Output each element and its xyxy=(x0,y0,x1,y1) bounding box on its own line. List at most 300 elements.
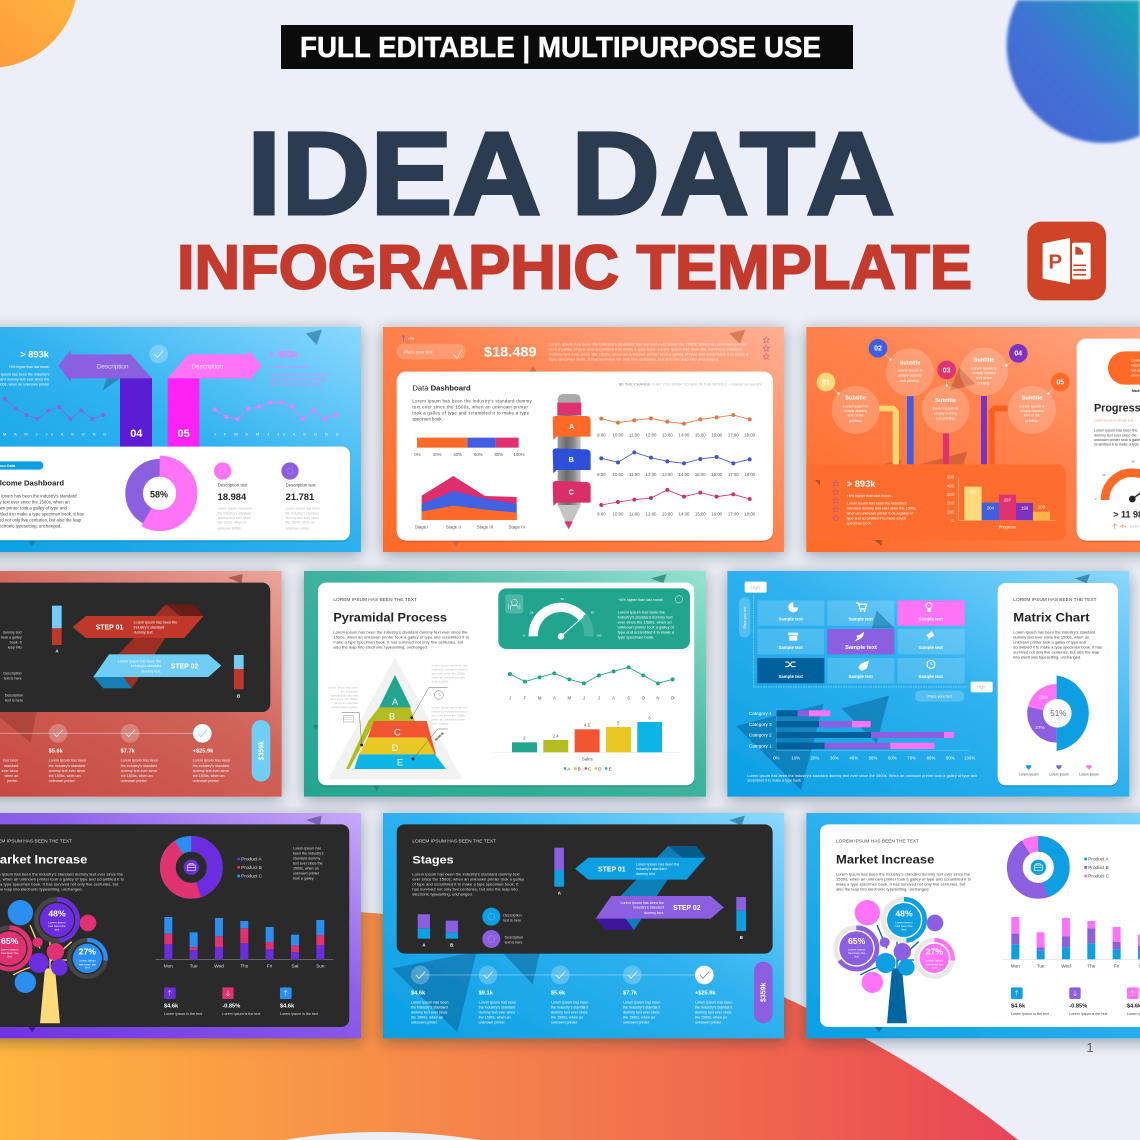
stacked bar chart: week: Wed xyxy=(214,963,224,968)
text: timeline values: unknown printer. xyxy=(623,1020,650,1024)
ring: 48%: 48% xyxy=(48,909,66,919)
stat: 4.6k purple: $4.6k xyxy=(164,1004,179,1010)
horizontal bar chart: 10% xyxy=(791,755,800,760)
stat: 4.6k pink xyxy=(1127,987,1140,1016)
text: timeline values: unknown printer. xyxy=(551,1020,578,1024)
card: dashboard white xyxy=(0,447,350,540)
text: timeline values: unknown printer. xyxy=(121,779,147,783)
card: dark xyxy=(0,824,349,1027)
gauge: 25 xyxy=(530,611,534,615)
line chart: C: 14:00 xyxy=(679,512,690,517)
text: header body: Lorem Ipsum has been the industry's standard dummy text ever since the 1500s. When an unknown printer xyxy=(549,343,747,347)
ring: 27%: 27% xyxy=(79,947,96,957)
axis: matrix xyxy=(753,595,967,687)
pill: place your text: +5% xyxy=(408,337,414,341)
line chart: B: 10:00 xyxy=(613,472,624,477)
bubble: subtitle 4: Subtitle xyxy=(974,358,994,364)
gauge: 75 xyxy=(591,611,594,615)
markers: numbered circles: 02 xyxy=(874,346,882,353)
line chart: months: F xyxy=(524,696,527,701)
ring: 27%: has been the xyxy=(926,962,943,966)
line chart: C: 15:00 xyxy=(695,512,706,517)
area chart: Stage II xyxy=(446,524,461,529)
stacked bar chart: week: Tue xyxy=(190,963,198,968)
bar chart: progress: 297 xyxy=(1004,498,1012,503)
text: pyramid captions: when an unknown printer xyxy=(432,717,465,721)
bar chart: progress: 500 xyxy=(947,475,955,480)
panel: market increase light xyxy=(806,813,1140,1038)
text: header body: dummy text ever since the 1500s, when an unknown printer took a galley of type and scrambled it to make a xyxy=(549,352,749,356)
ribbon: diagonal link xyxy=(108,604,203,688)
line chart: months: M xyxy=(538,696,542,701)
arrow: purple description xyxy=(58,350,152,447)
text: timeline values: the 1500s, when an xyxy=(49,774,81,778)
matrix grid: Sample text xyxy=(849,616,873,621)
stacked bar chart: 20% xyxy=(433,452,442,457)
text: timeline values: Lorem Ipsum has been xyxy=(411,1000,448,1004)
icon: PowerPoint xyxy=(1027,222,1106,300)
bar: A xyxy=(52,606,62,654)
icon list: descriptions: text is here xyxy=(505,941,523,945)
line chart: C: 10:00 xyxy=(613,512,624,517)
bar chart: progress: 300 xyxy=(947,492,955,497)
text: pyramid body xyxy=(333,630,470,650)
bubble: subtitle 2: Lorem Ipsum is xyxy=(897,369,923,373)
icon: PowerPoint: P xyxy=(1048,250,1062,273)
decor: bottom light ellipse xyxy=(284,1132,480,1140)
markers: numbered circles: 01 xyxy=(822,379,830,386)
stacked bar chart: week: Sun xyxy=(316,963,325,968)
bar chart: sales: E xyxy=(609,766,612,771)
card: white xyxy=(397,372,773,541)
arrow: step 02 xyxy=(596,896,724,930)
legend: products xyxy=(237,857,263,879)
stat: 893k: Lorem Ipsum has been the industry's xyxy=(847,501,907,505)
line chart: purple: M A M J Ju A S O N D xyxy=(3,431,106,436)
text: market body: make a type specimen book. It has survived not only five centuries, but xyxy=(836,881,966,886)
ring: 48%: text xyxy=(902,927,907,931)
bar: B: B xyxy=(237,693,240,698)
stat: 18.984: Lorem Ipsum has been xyxy=(218,507,252,511)
text: gauge description: Lorem Ipsum has been the xyxy=(618,610,666,615)
text: stages body: electronic typesetting, unchanged. xyxy=(412,892,473,897)
ring: 65%: 65% xyxy=(848,936,866,946)
line chart: A: 18:00 xyxy=(744,432,756,437)
text: matrix body xyxy=(1013,630,1102,660)
text: market body xyxy=(836,871,972,891)
markers: numbered circles: 03 xyxy=(943,367,951,374)
bar chart: progress: 199 xyxy=(1021,506,1029,511)
text: stat right xyxy=(269,349,329,386)
stat: 21.781: dummy text ever since xyxy=(286,516,319,520)
text: timeline values: the 1500s, when an xyxy=(551,1015,583,1019)
line chart: months: J xyxy=(598,696,600,701)
text: timeline values: dummy text ever since xyxy=(49,769,85,773)
arrow: purple description: Description xyxy=(97,363,129,370)
text: timeline values: the industry's standard xyxy=(695,1005,732,1009)
bar chart: sales: 2.4 xyxy=(553,733,559,738)
arrow: step 01: industry's standard xyxy=(134,625,164,629)
text: pyramid captions: when an unknown xyxy=(334,701,359,705)
ring: 65%: has been the xyxy=(848,951,866,955)
legend: products: Product C xyxy=(1088,874,1110,879)
bar chart: progress: 200 xyxy=(947,501,955,506)
text: left body: text is here xyxy=(4,677,22,681)
donut chart: 51% xyxy=(1027,675,1089,751)
legend: products xyxy=(1084,857,1110,879)
horizontal bar chart: Category 2 xyxy=(749,733,772,738)
stat: 4.6k blue: $4.6k xyxy=(1011,1004,1026,1010)
text: left body: dummy text xyxy=(3,631,22,635)
text: left body: Description xyxy=(5,694,23,698)
icon: rating stars xyxy=(763,337,769,359)
text: timeline values: printer. xyxy=(7,779,18,783)
legend: hearts xyxy=(1019,765,1099,776)
text: header body: took a galley of type and scrambled it to make a type book. Lorem Ipsum has been the industry's standard xyxy=(549,347,742,351)
text: side note xyxy=(293,847,324,881)
subtitle: INFOGRAPHIC TEMPLATE xyxy=(177,234,972,302)
text: pyramid body: make a type specimen book. It has survived not only five centuries, but xyxy=(333,640,464,645)
bar chart: progress: 400 xyxy=(947,483,955,488)
line chart: B xyxy=(597,450,756,477)
line chart: B: 18:00 xyxy=(744,472,756,477)
horizontal bar chart: Category 3 xyxy=(749,722,772,727)
bubble: subtitle 3: simply dummy xyxy=(934,412,957,416)
pill: $359k: $359k xyxy=(258,741,265,760)
bar: B xyxy=(234,655,244,698)
text: timeline values: Lorem Ipsum has been xyxy=(193,759,230,763)
line chart: B: 11:00 xyxy=(629,472,640,477)
text: left body: text is here xyxy=(5,699,23,703)
arrow: step 01: Lorem Ipsum has been the xyxy=(134,621,177,625)
arrow: step 02: Lorem Ipsum has been the xyxy=(118,659,161,663)
text: stages body xyxy=(412,871,524,897)
bubble: subtitle 3 xyxy=(922,385,970,433)
text: stages body: of type and scrambled it to make a type specimen book. It xyxy=(412,882,519,887)
text: timeline values: Lorem Ipsum has been xyxy=(49,759,86,763)
line chart: months: N xyxy=(656,696,660,701)
donut chart: 51%: 22% xyxy=(1038,694,1048,699)
ring: 65%: 65% xyxy=(1,936,19,946)
pill: horizontal place text: Place your text xyxy=(928,695,952,699)
legend: products: Product C xyxy=(241,874,263,879)
horizontal bar chart: 70% xyxy=(907,755,916,760)
text: pyramid body: also the leap into electronic typesetting, unchanged. xyxy=(333,645,428,650)
area chart: Stage IV xyxy=(509,524,525,529)
bar chart: sales: 6 xyxy=(648,715,651,720)
line chart: B: 13:00 xyxy=(662,472,673,477)
text: timeline values: Lorem Ipsum has been xyxy=(121,759,158,763)
text: pyramid captions: text ever since the 1500s, xyxy=(432,713,466,717)
ring: 48%: text xyxy=(55,927,60,931)
ring: 65% xyxy=(0,928,30,969)
line chart: months: M xyxy=(568,696,572,701)
line chart: C: 9:00 xyxy=(597,512,606,517)
bubble: subtitle 1: Lorem Ipsum is xyxy=(843,404,868,408)
matrix grid: Sample text xyxy=(918,617,943,622)
text: timeline values: standard xyxy=(4,764,18,768)
arrow: step 01 xyxy=(73,616,203,638)
mini bars: A and B xyxy=(418,914,458,948)
text: timeline values: the 1500s, when an xyxy=(695,1015,727,1019)
timeline xyxy=(411,966,714,984)
stacked bar chart: week: Mon xyxy=(164,963,173,968)
text: timeline values: dummy text ever since xyxy=(695,1010,732,1014)
text: pyramid body: Lorem Ipsum has been the industry's standard dummy text ever since the xyxy=(333,630,468,635)
decor: bottom gradient blob xyxy=(0,908,1018,1140)
bubble: subtitle 5: printing. xyxy=(1025,419,1038,423)
text: gauge description: industry's standard dummy text xyxy=(618,615,674,620)
label: eyebrow: LOREM IPSUM HAS BEEN THE TEXT xyxy=(1013,597,1097,603)
decor: top-left orange circle xyxy=(0,0,76,67)
text: stat right: +6% higher than last month xyxy=(269,365,310,369)
panel: data dashboard xyxy=(383,327,784,552)
icon list: descriptions: Description xyxy=(503,913,522,917)
horizontal bar chart: 60% xyxy=(888,755,897,760)
text: left body: took a galley xyxy=(1,636,22,640)
text: timeline values: +$25.9k xyxy=(695,990,716,996)
line chart: A xyxy=(597,413,756,437)
matrix grid: Sample text xyxy=(918,645,943,650)
arrow: step 02: dummy text. xyxy=(644,911,664,915)
title: IDEA DATA xyxy=(247,108,895,240)
stat: 21.781: the 1500s, when an xyxy=(286,521,315,525)
stat: 4.6k blue: $4.6k xyxy=(280,1004,295,1010)
line chart: A: 17:00 xyxy=(728,432,739,437)
text: side note: been the industry's xyxy=(293,852,324,856)
stat: 18.984: dummy text ever since xyxy=(218,516,251,520)
markers: numbered circles: 05 xyxy=(1056,379,1064,386)
text: dashboard body: text ever since the 1500s, when an unknown printer xyxy=(412,405,529,410)
stat: 4.6k blue xyxy=(1011,987,1049,1016)
stat: 893k: > 893k xyxy=(847,479,876,489)
text: timeline values: the industry's standard xyxy=(411,1005,448,1009)
label: eyebrow: LOREM IPSUM HAS BEEN THE TEXT xyxy=(333,597,417,603)
stacked bar chart: week xyxy=(1003,917,1140,968)
text: stages body: Lorem Ipsum has been the industry's standard dummy text xyxy=(412,871,521,876)
bubble: subtitle 1: simply dummy xyxy=(844,409,868,413)
horizontal bar chart: 0% xyxy=(773,755,780,760)
bar chart: progress: Progress xyxy=(999,525,1016,530)
ring: 48%: Lorem Ipsum xyxy=(48,921,66,925)
text: timeline values: dummy text ever since xyxy=(411,1010,448,1014)
timeline xyxy=(0,724,212,743)
stat: $18.489: $18.489 xyxy=(484,344,537,359)
text: gauge description: type and scrambled it to make a xyxy=(618,630,675,635)
ring: 48%: has been the xyxy=(48,924,66,928)
bubble: subtitle 3: text printing. xyxy=(936,417,956,421)
bubble: subtitle 4: simply dummy xyxy=(972,371,996,375)
icon list: descriptions xyxy=(482,908,523,948)
stat: 18.984: the 1500s, when an xyxy=(218,521,247,525)
pencil illustration: B xyxy=(569,455,574,464)
text: timeline values: the industry's standard xyxy=(623,1005,660,1009)
icon: people xyxy=(505,594,523,613)
text: matrix footnote: Lorem Ipsum has been the industry's standard dummy text ever since the 1500s. When an unknown printer took a galley of type and xyxy=(747,774,977,778)
bubble: subtitle 3: Subtitle xyxy=(935,398,956,404)
text: pyramid captions: industry's standard dummy xyxy=(432,668,468,672)
text: dashboard body: specimen book. xyxy=(412,417,443,422)
donut chart: 58%: 58% xyxy=(150,489,168,499)
bar chart: progress: 102 xyxy=(1038,505,1046,510)
band: orange stats xyxy=(806,464,1066,541)
matrix grid xyxy=(757,600,965,683)
gauge: 25 xyxy=(1102,473,1106,477)
bar chart: sales: Sales xyxy=(582,757,593,762)
text: timeline values: $7.7k xyxy=(121,749,136,755)
card: dark xyxy=(0,583,270,712)
stacked bar chart: 80% xyxy=(494,452,503,457)
area chart: Stage III xyxy=(477,524,493,529)
horizontal bar chart: 50% xyxy=(869,755,877,760)
line chart: B: 16:00 xyxy=(711,472,723,477)
stat: 4.6k purple: Lorem Ipsum is the text xyxy=(164,1012,202,1016)
pill: horizontal place text xyxy=(915,691,964,702)
text: timeline values: unknown printer. xyxy=(479,1020,506,1024)
text: timeline values: has been xyxy=(3,759,18,763)
stacked bar chart: week: Thu xyxy=(240,963,249,968)
legend: products: Product B xyxy=(241,865,262,870)
panel: matrix chart xyxy=(727,571,1129,797)
gauge: Lorem xyxy=(1130,524,1140,528)
arrow: step 01: dummy text. xyxy=(134,630,154,634)
bubble: subtitle 1: Subtitle xyxy=(845,396,866,402)
matrix grid: Sample text xyxy=(849,674,873,679)
text: timeline values: the industry's standard xyxy=(479,1005,515,1009)
card: white xyxy=(998,583,1118,785)
text: stat right: standard dummy text ever since the xyxy=(269,377,327,381)
text: pyramid body: 1500s, when an unknown printer took a galley of type and scrambled it to xyxy=(333,635,470,640)
stat: -0.85% pink: -0.85% xyxy=(222,1004,240,1010)
gauge: 100 xyxy=(596,634,602,638)
matrix grid: Sample text xyxy=(779,616,803,621)
label: high y xyxy=(745,582,767,593)
bar: A: A xyxy=(558,890,562,895)
markers: numbered circles xyxy=(817,339,1070,395)
text: pyramid captions: took a galley. xyxy=(432,721,449,725)
bar: A: A xyxy=(55,649,59,654)
bubble: subtitle 4 xyxy=(960,348,1008,396)
pill: $359k xyxy=(754,962,773,1023)
text: gauge description xyxy=(618,596,683,639)
horizontal bar chart: 20% xyxy=(811,755,819,760)
line chart: months: S xyxy=(627,696,630,701)
bubble: subtitle 3: Lorem Ipsum is xyxy=(933,407,958,411)
text: quote: BE THE CHANGE THAT YOU WISH TO SEE IN THE WORLD ~ Mahatma Gandhi xyxy=(619,382,762,386)
line chart: C xyxy=(597,488,756,517)
ring: 65% xyxy=(836,928,877,969)
text: left body: Description xyxy=(3,672,22,676)
stat: 4.6k purple xyxy=(164,987,202,1016)
text: matrix body: scrambled it to make a type specimen book. It has xyxy=(1013,645,1102,650)
icon list: descriptions: Description xyxy=(505,936,523,940)
arrow: step 02: dummy text. xyxy=(141,669,161,673)
stat: 18.984: the industry's standard xyxy=(218,511,251,515)
text: stat left: > 893k xyxy=(20,349,50,359)
stacked bar chart: week: Mon xyxy=(1011,963,1020,968)
text: market body: 1500s, when an unknown printer took a galley of type and scrambled it to xyxy=(836,876,972,881)
line chart: A: 11:00 xyxy=(629,432,640,437)
pyramid chart: A xyxy=(392,697,399,707)
ribbon: orange xyxy=(989,406,1008,464)
pencil illustration xyxy=(553,394,591,529)
line chart: A: 13:00 xyxy=(662,432,673,437)
text: timeline values: the industry's standard xyxy=(121,764,157,768)
heading: data dashboard: Data Dashboard xyxy=(412,384,471,393)
ring: 48%: Lorem Ipsum xyxy=(895,921,913,925)
stacked bar chart: week: Thu xyxy=(1087,963,1096,968)
text: pyramid captions: Lorem Ipsum has been the xyxy=(432,705,467,709)
text: timeline values xyxy=(411,990,732,1024)
bar: B xyxy=(736,897,746,940)
text: timeline values: dummy text ever since xyxy=(479,1010,515,1014)
ring: 27%: 27% xyxy=(926,947,943,957)
arrow: step 02: industry's standard xyxy=(131,664,161,668)
ribbon: pink xyxy=(943,433,949,464)
label: high y: High xyxy=(751,585,760,590)
stat: 18.984 xyxy=(214,462,252,531)
panel: market increase dark xyxy=(0,813,361,1038)
text: dashboard body xyxy=(0,493,84,528)
panel: pyramidal process xyxy=(304,571,706,797)
legend: hearts: Lorem Ipsum xyxy=(1019,772,1039,776)
stat: -0.85% purple: Lorem Ipsum is the text xyxy=(1069,1012,1107,1016)
text: market body: also the leap into electronic typesetting, unchanged. xyxy=(836,886,930,891)
text: pyramid captions: printer took a galley. xyxy=(332,705,358,709)
line chart: A: 14:00 xyxy=(679,432,690,437)
arrow: step 01: Lorem Ipsum has been the xyxy=(636,862,679,866)
line chart: B: 15:00 xyxy=(695,472,706,477)
stacked bar chart: week: Wed xyxy=(1061,963,1071,968)
line chart: B: 17:00 xyxy=(728,472,739,477)
pill: vertical place text: Place your text xyxy=(743,607,747,629)
ring: 65%: Lorem Ipsum xyxy=(848,948,866,952)
line chart: A: 9:00 xyxy=(597,432,606,437)
text: progress body: dummy text ever since the xyxy=(1094,433,1137,437)
text: timeline values: the 1500s, when an xyxy=(479,1015,511,1019)
text: timeline values xyxy=(2,749,230,783)
text: progress body xyxy=(1094,418,1140,447)
text: timeline values: Lorem Ipsum has been xyxy=(551,1000,588,1004)
text: timeline values: dummy text ever since xyxy=(551,1010,588,1014)
legend: hearts: Lorem Ipsum xyxy=(1079,772,1099,776)
line chart: months: D xyxy=(671,696,674,701)
text: stat left xyxy=(0,349,50,386)
text: timeline values: the 1500s, when an xyxy=(623,1015,655,1019)
text: timeline values: the industry's standard xyxy=(551,1005,588,1009)
mini bars: A and B: B xyxy=(450,943,453,948)
header banner xyxy=(281,25,853,69)
bubble: subtitle 5: Lorem Ipsum is xyxy=(1019,404,1045,408)
bubble: subtitle 5: Subtitle xyxy=(1022,396,1042,402)
ring: 65%: text xyxy=(854,954,859,958)
stacked bar chart: week: Sat xyxy=(291,963,299,968)
text: pyramid captions: text ever since the 1500s, xyxy=(432,672,466,676)
gauge: 0 xyxy=(523,634,525,638)
line chart: months: O xyxy=(642,696,646,701)
line chart: B: 9:00 xyxy=(597,472,606,477)
ring: 65%: has been the xyxy=(1,951,19,955)
text: dashboard body: took a galley of type and scrambled it to make a type xyxy=(412,411,530,416)
line chart: C: 16:00 xyxy=(711,512,723,517)
arrow: step 02: STEP 02 xyxy=(171,661,198,670)
panel: home dashboard xyxy=(0,327,361,552)
text: timeline values: dummy text ever since xyxy=(193,769,229,773)
icon list: descriptions: text is here xyxy=(503,918,521,922)
pyramid chart xyxy=(328,658,462,779)
line chart: months: A xyxy=(612,696,615,701)
markers: numbered circles: 04 xyxy=(1014,351,1022,358)
